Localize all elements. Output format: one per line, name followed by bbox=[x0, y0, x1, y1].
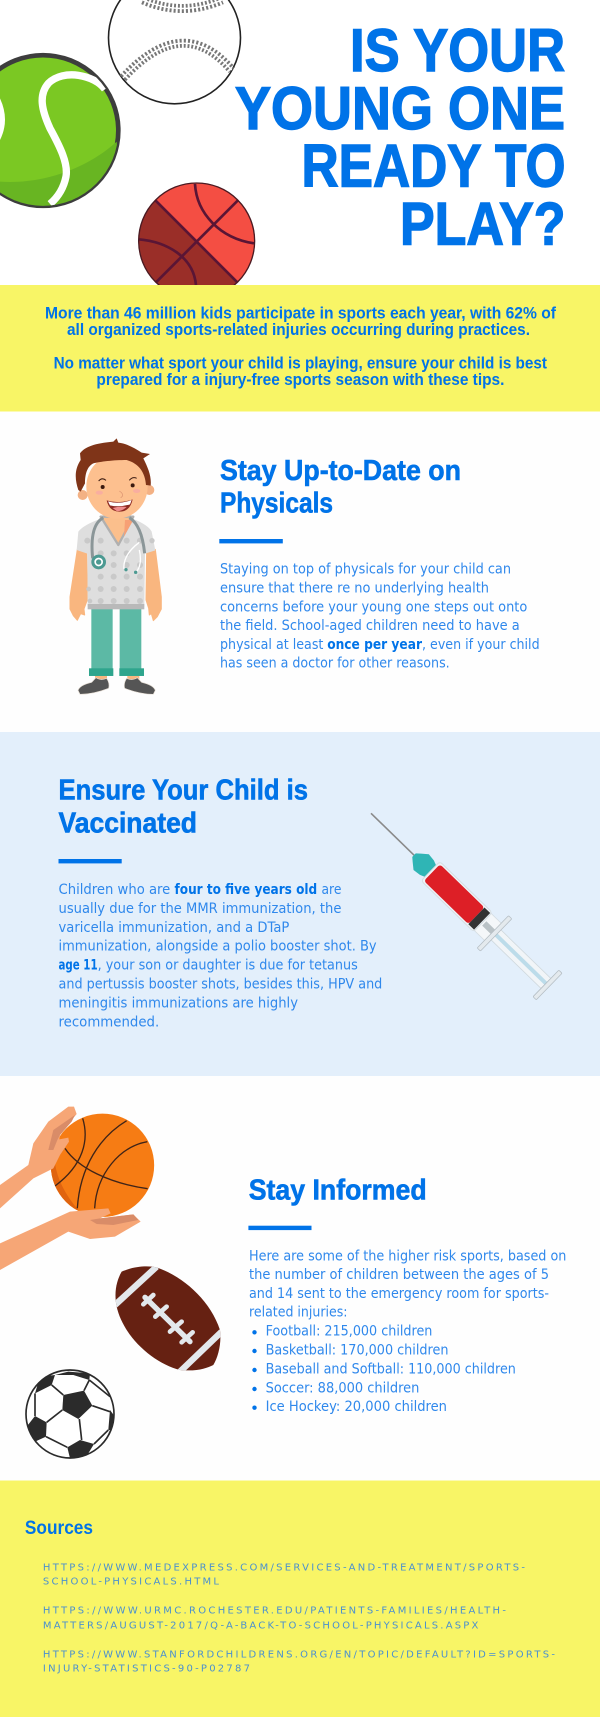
vaccinated text: recommended. bbox=[58, 1014, 159, 1030]
vaccinated text: , your son or daughter is due for tetanus bbox=[98, 958, 358, 974]
vaccinated text: and pertussis booster shots, besides this, HPV and bbox=[58, 977, 382, 993]
physicals text: Staying on top of physicals for your child can bbox=[220, 562, 511, 578]
title bbox=[235, 17, 566, 257]
intro text: all organized sports-related injuries occurring during practices. bbox=[67, 320, 530, 339]
intro text: prepared for a injury-free sports season with these tips. bbox=[96, 370, 504, 389]
icon: syringe bbox=[355, 797, 565, 1003]
vaccinated text: varicella immunization, and a DTaP bbox=[58, 920, 289, 936]
vaccinated text bbox=[58, 882, 382, 1030]
heading: stay informed: Stay Informed bbox=[249, 1174, 427, 1206]
title: IS YOUR bbox=[350, 17, 565, 84]
vaccinated text: Children who are bbox=[58, 882, 170, 898]
intro text: No matter what sport your child is playing, ensure your child is best bbox=[54, 353, 547, 372]
icon: red basketball bbox=[138, 182, 256, 285]
panel: sources bbox=[0, 1480, 600, 1717]
vaccinated text: immunization, alongside a polio booster shot. By bbox=[58, 939, 377, 955]
heading: physicals bbox=[220, 455, 461, 520]
physicals text: ensure that there re no underlying health bbox=[220, 580, 489, 596]
heading: vaccinated: Ensure Your Child is bbox=[58, 774, 308, 806]
source links: HTTPS://WWW.MEDEXPRESS.COM/SERVICES-AND-TREATMENT/SPORTS- bbox=[43, 1562, 525, 1573]
list of higher risk sports: Baseball and Softball: 110,000 children bbox=[266, 1361, 516, 1377]
source links: MATTERS/AUGUST-2017/Q-A-BACK-TO-SCHOOL-PHYSICALS.ASPX bbox=[43, 1620, 479, 1631]
list of higher risk sports: Football: 215,000 children bbox=[266, 1324, 432, 1340]
physicals text: the field. School-aged children need to have a bbox=[220, 618, 520, 634]
vaccinated text: are bbox=[322, 882, 341, 898]
panel: physicals bbox=[0, 412, 600, 732]
stay informed text: Here are some of the higher risk sports, based on bbox=[249, 1248, 566, 1264]
list of higher risk sports: Ice Hockey: 20,000 children bbox=[266, 1399, 447, 1415]
list of higher risk sports: Soccer: 88,000 children bbox=[266, 1380, 419, 1396]
stay informed text: the number of children between the ages of 5 bbox=[249, 1267, 549, 1283]
intro text: More than 46 million kids participate in sports each year, with 62% of bbox=[45, 303, 556, 322]
vaccinated text: age 11 bbox=[58, 958, 98, 974]
panel: vaccinated bbox=[0, 732, 600, 1076]
heading rule bbox=[58, 859, 122, 863]
physicals text: once per year bbox=[327, 637, 422, 653]
source links: SCHOOL-PHYSICALS.HTML bbox=[43, 1576, 219, 1587]
list of higher risk sports: Basketball: 170,000 children bbox=[266, 1342, 448, 1358]
icon: baseball bbox=[108, 0, 240, 104]
vaccinated text: four to five years old bbox=[174, 882, 317, 898]
icon: tennis ball bbox=[0, 55, 123, 213]
heading rule bbox=[219, 539, 283, 543]
heading rule bbox=[248, 1226, 312, 1230]
physicals text: concerns before your young one steps out onto bbox=[220, 599, 527, 615]
heading: physicals: Physicals bbox=[220, 488, 333, 520]
icon: american football bbox=[115, 1266, 222, 1372]
panel: stay informed bbox=[0, 1106, 566, 1459]
heading: vaccinated: Vaccinated bbox=[58, 808, 197, 840]
stay informed text: and 14 sent to the emergency room for sports- bbox=[249, 1286, 549, 1302]
vaccinated text: meningitis immunizations are highly bbox=[58, 995, 298, 1011]
icon: hands holding basketball bbox=[0, 1107, 154, 1270]
source links: INJURY-STATISTICS-90-P02787 bbox=[43, 1663, 250, 1674]
physicals text: , even if your child bbox=[422, 637, 540, 653]
icon: child doctor bbox=[70, 438, 161, 694]
physicals text: physical at least bbox=[220, 637, 324, 653]
title: YOUNG ONE bbox=[235, 75, 565, 142]
stay informed text bbox=[249, 1248, 566, 1321]
source links bbox=[43, 1562, 555, 1674]
source links: HTTPS://WWW.STANFORDCHILDRENS.ORG/EN/TOPIC/DEFAULT?ID=SPORTS- bbox=[43, 1649, 555, 1660]
source links: HTTPS://WWW.URMC.ROCHESTER.EDU/PATIENTS-FAMILIES/HEALTH- bbox=[43, 1606, 506, 1617]
header panel bbox=[0, 0, 566, 299]
heading: physicals: Stay Up-to-Date on bbox=[220, 455, 461, 487]
panel: intro bbox=[0, 285, 600, 412]
physicals text: has seen a doctor for other reasons. bbox=[220, 656, 450, 672]
vaccinated text: usually due for the MMR immunization, the bbox=[58, 901, 341, 917]
title: PLAY? bbox=[400, 190, 566, 257]
icon: soccer ball bbox=[26, 1370, 115, 1458]
stay informed text: related injuries: bbox=[249, 1305, 348, 1321]
intro text bbox=[45, 303, 556, 389]
list of higher risk sports bbox=[252, 1324, 516, 1415]
physicals text bbox=[220, 562, 540, 672]
heading: sources: Sources bbox=[25, 1518, 93, 1539]
heading: vaccinated bbox=[58, 774, 308, 840]
